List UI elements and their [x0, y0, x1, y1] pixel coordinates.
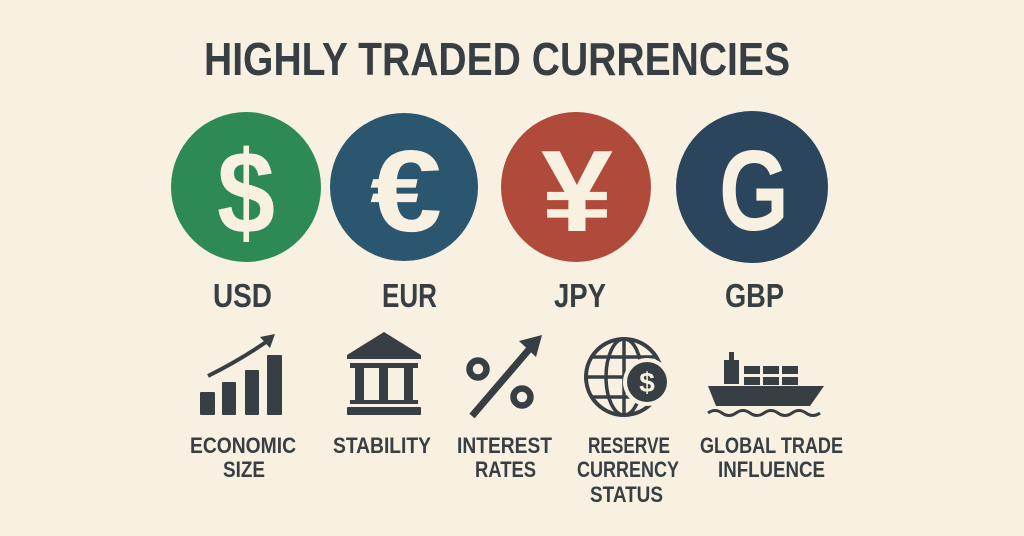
label: economic size	[190, 433, 296, 482]
coin: EUR: €	[370, 126, 442, 256]
label: reserve currency status: CURRENCY	[577, 457, 679, 482]
icon: bank	[347, 332, 421, 415]
title: HIGHLY TRADED CURRENCIES	[204, 33, 790, 85]
currency labels: JPY	[554, 277, 606, 314]
label: economic size: ECONOMIC	[190, 433, 296, 458]
label: economic size: SIZE	[223, 457, 265, 482]
label: interest rates: RATES	[475, 457, 536, 482]
label: stability: STABILITY	[333, 433, 431, 458]
currency labels	[213, 277, 784, 314]
currency labels: GBP	[725, 277, 784, 314]
label: interest rates: INTEREST	[457, 433, 552, 458]
currency labels: USD	[213, 277, 272, 314]
label: global trade influence: GLOBAL TRADE	[700, 433, 843, 458]
coin: USD	[171, 112, 321, 262]
coin: GBP: G	[719, 128, 789, 255]
icon: cargo ship	[708, 352, 824, 416]
label: reserve currency status	[577, 433, 679, 507]
factor labels	[190, 433, 843, 507]
label: global trade influence	[700, 433, 843, 482]
label: interest rates	[457, 433, 552, 482]
icon: bar chart growth	[200, 334, 282, 415]
coin: EUR	[330, 113, 478, 261]
icon: globe with dollar: $	[639, 367, 655, 398]
currency labels: EUR	[382, 277, 437, 314]
icon: globe with dollar	[586, 339, 671, 415]
label: global trade influence: INFLUENCE	[718, 457, 825, 482]
coin: JPY	[501, 112, 651, 262]
coin: JPY: ¥	[541, 126, 613, 256]
label: reserve currency status: STATUS	[590, 482, 663, 507]
icon: percent arrow	[470, 335, 542, 416]
coin: USD: $	[217, 127, 275, 259]
coin: GBP	[676, 111, 828, 263]
label: reserve currency status: RESERVE	[588, 433, 670, 458]
